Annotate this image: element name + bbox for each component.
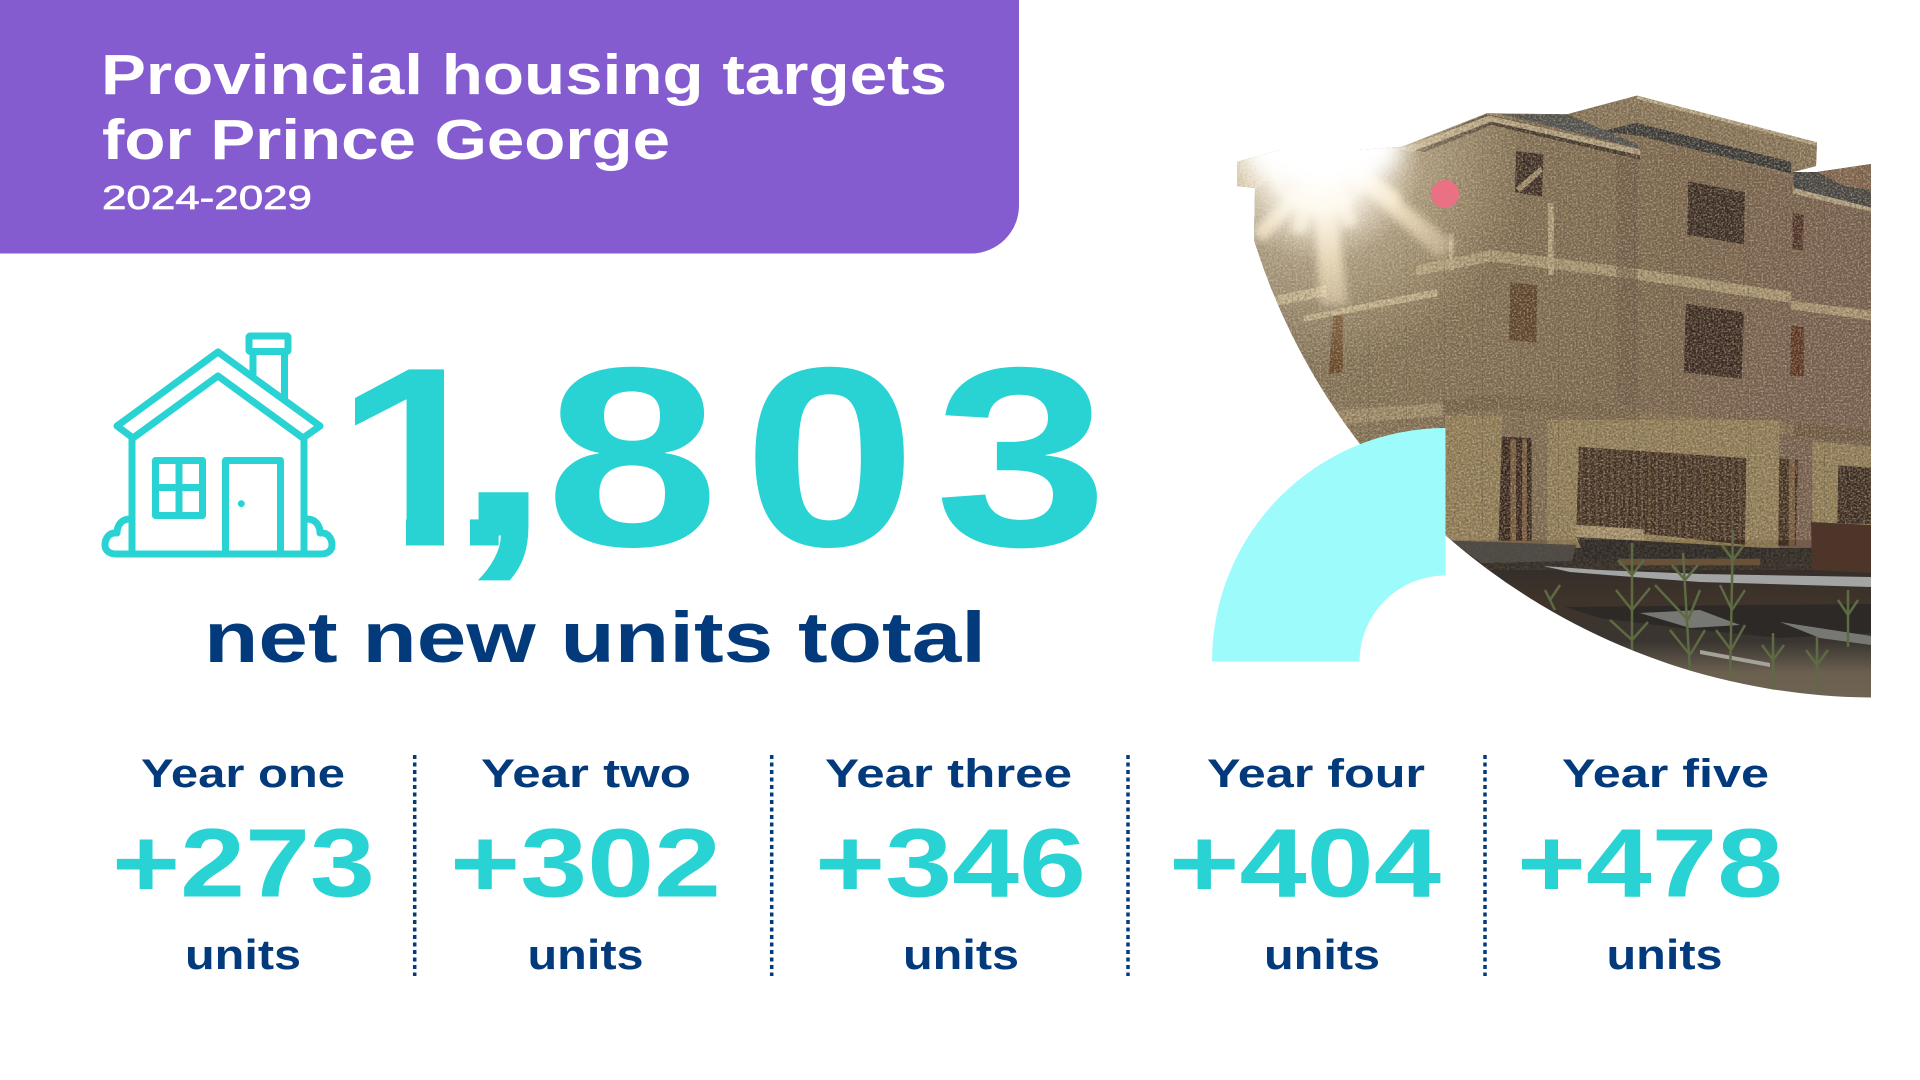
title: for Prince George [102, 108, 670, 172]
column: year five [1517, 752, 1783, 978]
unit label: units [185, 931, 301, 978]
banner background [0, 0, 1019, 254]
value: +404: +404 [1169, 808, 1441, 918]
horizontal trim bands [1416, 250, 1871, 320]
yard: snow, mud and plants [1543, 522, 1871, 693]
photo: building under construction [1237, 96, 1871, 698]
upper windows [1515, 151, 1745, 244]
middle windows [1509, 282, 1537, 343]
big number: total units [355, 366, 1097, 580]
vertical corner shadow [1617, 153, 1638, 407]
ground floor windows [1499, 436, 1532, 541]
unit label: units [1264, 931, 1380, 978]
upper roof block [1572, 96, 1817, 177]
big number: total units: , [454, 273, 552, 597]
heading: year three: Year three [825, 752, 1072, 796]
sun flare [1237, 114, 1509, 348]
lens flare [1431, 180, 1459, 208]
decorative quarter arc [1212, 428, 1446, 662]
big number: total units: 1 [334, 313, 507, 600]
unit label: units [528, 931, 644, 978]
column: year two [450, 752, 721, 978]
sun rays [1254, 178, 1456, 309]
panel: title banner [0, 0, 1019, 254]
big number: total units: 0 [743, 313, 917, 600]
icon: dumpster [1811, 522, 1871, 573]
heading: year four: Year four [1207, 752, 1425, 796]
left eave [1227, 149, 1402, 188]
icon: house [105, 336, 332, 554]
title: Provincial housing targets [101, 43, 947, 107]
sun glow [1237, 114, 1509, 348]
big number: total units: 3 [935, 313, 1108, 600]
wall base [1227, 86, 1878, 559]
heading: year five: Year five [1562, 752, 1769, 796]
small tree behind building [1254, 205, 1255, 240]
column: year three [815, 752, 1086, 978]
divider 4 [1483, 755, 1487, 976]
heading: year one: Year one [141, 752, 345, 796]
ground [1460, 548, 1871, 698]
right roof [1793, 164, 1871, 210]
value: +478: +478 [1517, 808, 1783, 918]
unit label: units [1606, 931, 1722, 978]
value: +302: +302 [450, 808, 721, 918]
canopy and lower band [1336, 403, 1443, 424]
heading: year two: Year two [481, 752, 691, 796]
divider 3 [1126, 755, 1130, 976]
left roof [1402, 114, 1640, 160]
column: year one [112, 752, 375, 978]
ground floor wall [1445, 416, 1871, 548]
title [101, 43, 947, 172]
unit label: units [903, 931, 1019, 978]
divider 1 [413, 755, 416, 976]
panel seams and wood grain [1220, 90, 1880, 570]
label: net new units total: net new units total [204, 599, 986, 678]
value: +273: +273 [112, 808, 375, 918]
subtitle: years: 2024-2029 [102, 179, 312, 216]
big number: total units: 8 [545, 313, 719, 600]
divider 2 [770, 755, 773, 976]
value: +346: +346 [815, 808, 1086, 918]
column: year four [1169, 752, 1441, 978]
